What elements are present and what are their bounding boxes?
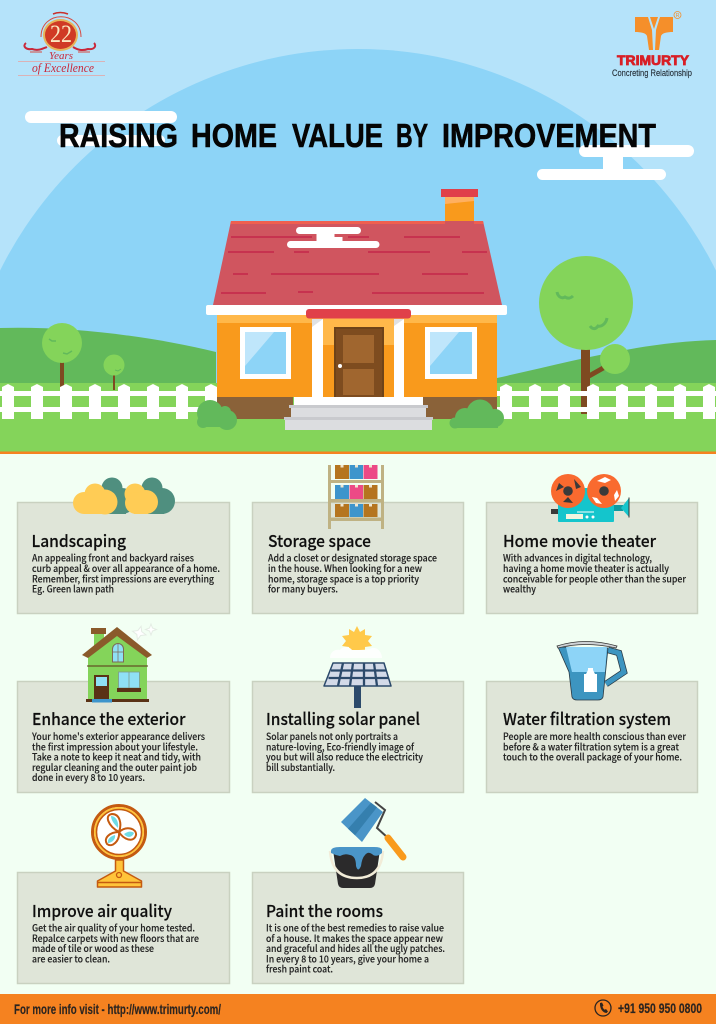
heading: Installing solar panel (266, 706, 420, 730)
heading: Storage space (268, 528, 371, 552)
heading: Landscaping (32, 528, 126, 552)
body text (503, 551, 687, 596)
title: VALUE (292, 117, 383, 154)
logo: 22 years of excellence: 22 (50, 21, 72, 48)
body text: wealthy (503, 582, 537, 596)
website link: For more info visit - http://www.trimurty.com/ (14, 1002, 221, 1017)
panel: enhance the exterior (18, 624, 230, 792)
body text: home, storage space is a top priority (268, 571, 420, 585)
roof (213, 221, 502, 305)
body text (503, 729, 687, 764)
icon: solar panel (324, 626, 391, 708)
body text (32, 920, 199, 965)
chimney (441, 189, 478, 224)
body text: Your home's exterior appearance delivers (31, 729, 205, 743)
heading: Water filtration system (503, 706, 671, 730)
steps (284, 397, 433, 430)
left bush (197, 400, 237, 430)
icon: bushes (73, 478, 175, 514)
logo: 22 years of excellence: of Excellence (32, 60, 94, 75)
body text: you but will also reduce the electricity (266, 750, 424, 764)
panel: paint the rooms (252, 798, 464, 984)
body text: An appealing front and backyard raises (32, 551, 194, 565)
panel: installing solar panel (252, 626, 464, 792)
body text: having a home movie theater is actually (503, 561, 670, 575)
body text (31, 729, 205, 784)
panel: home movie theater (486, 474, 698, 614)
body text (266, 729, 424, 774)
foundation (217, 397, 497, 419)
body text: the first impression about your lifestyle. (32, 739, 198, 753)
panel: storage space (252, 465, 464, 614)
heading: Enhance the exterior (32, 706, 186, 730)
logo: Trimurty: R (676, 13, 680, 19)
body text: fresh paint coat. (266, 962, 333, 976)
body text: in the house. When looking for a new (268, 561, 422, 575)
body text: bill substantially. (266, 760, 335, 774)
logo: Trimurty (612, 12, 692, 79)
footer bar (0, 994, 716, 1024)
title (59, 117, 656, 154)
body text: Add a closet or designated storage space (268, 551, 437, 565)
body text: for many buyers. (268, 582, 338, 596)
panel: water filtration system (486, 642, 698, 792)
door (334, 327, 384, 397)
icon: phone (595, 1000, 611, 1016)
body text: touch to the overall package of your home. (503, 750, 682, 764)
right picket fence (497, 384, 716, 419)
body text: People are more health conscious than ever (503, 729, 687, 743)
left small trees (42, 323, 124, 390)
body text: regular cleaning and the outer paint job (32, 760, 197, 774)
body text: done in every 8 to 10 years. (32, 770, 145, 784)
body text: are easier to clean. (32, 951, 110, 965)
body text: made of tile or wood as these (32, 941, 154, 955)
walls (217, 315, 497, 397)
large right tree (539, 256, 633, 414)
logo: 22 years of excellence: Years (49, 50, 73, 62)
left picket fence (0, 384, 217, 419)
logo: Trimurty: Concreting Relationship (612, 68, 692, 79)
title: HOME (191, 117, 277, 154)
title: RAISING (59, 117, 178, 154)
body text: of a house. It makes the space appear new (266, 931, 443, 945)
body text: Eg. Green lawn path (32, 582, 114, 596)
panel: landscaping (18, 478, 230, 614)
right bush (450, 400, 504, 428)
body text: Take a note to keep it neat and tidy, with (32, 750, 201, 764)
icon: film projector (551, 474, 629, 522)
logo: Trimurty: TRIMURTY (617, 53, 689, 68)
wall top highlight (217, 315, 497, 323)
heading: Home movie theater (503, 528, 656, 552)
house (197, 189, 507, 430)
body text (268, 551, 437, 596)
heading: Improve air quality (32, 898, 172, 922)
body text: It is one of the best remedies to raise value (266, 920, 444, 934)
icon: fan (92, 806, 146, 887)
heading: Paint the rooms (266, 898, 383, 922)
body text: In every 8 to 10 years, give your home a (266, 951, 429, 965)
porch (306, 309, 411, 397)
body text (266, 920, 445, 976)
left window (240, 327, 291, 379)
body text: before & a water filtration sytem is a great (503, 739, 679, 753)
body text: conceivable for people other than the super (503, 571, 687, 585)
body text: Remember, first impressions are everything (32, 571, 214, 585)
eave (206, 305, 507, 315)
logo: 22 years of excellence (18, 12, 105, 76)
body text: With advances in digital technology, (503, 551, 652, 565)
icon: paint bucket and roller (330, 798, 403, 888)
icon: green house (82, 624, 156, 702)
title: IMPROVEMENT (442, 117, 656, 154)
panel: improve air quality (18, 806, 230, 984)
body text (32, 551, 220, 596)
icon: storage shelf (328, 465, 384, 529)
body text: nature-loving, Eco-friendly image of (266, 739, 415, 753)
right window (425, 327, 477, 379)
body text: Solar panels not only portraits a (266, 729, 398, 743)
body text: and graceful and hides all the ugly patches. (266, 941, 445, 955)
icon: water pitcher (557, 642, 624, 700)
body text: Get the air quality of your home tested. (32, 920, 195, 934)
body text: curb appeal & over all appearance of a home. (32, 561, 220, 575)
title: BY (396, 117, 428, 154)
body text: Repalce carpets with new floors that are (32, 931, 199, 945)
